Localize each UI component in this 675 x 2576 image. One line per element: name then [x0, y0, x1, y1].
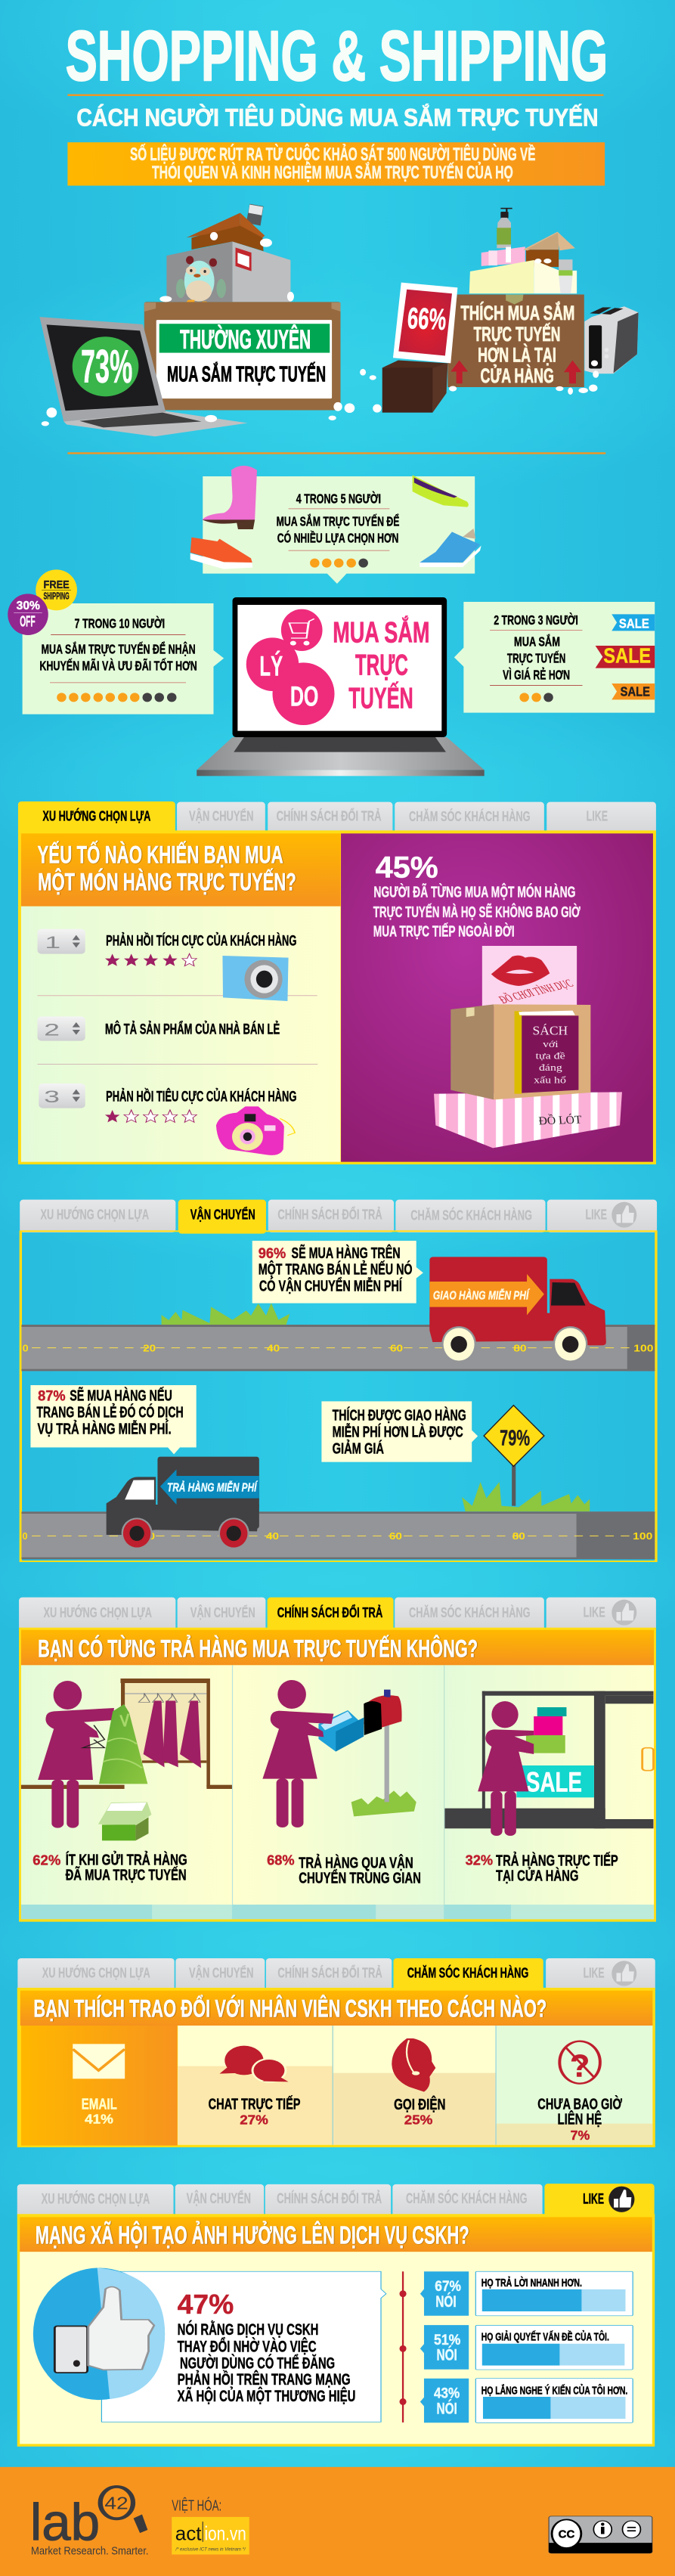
factor 1: 1: [45, 933, 60, 952]
badge: free shipping: [36, 569, 77, 610]
callout: 47%: NÓI RẰNG DỊCH VỤ CSKH: [178, 2320, 318, 2339]
laptop: reasons for online shopping: TUYẾN: [348, 681, 413, 715]
callout: 96%: [252, 1241, 423, 1303]
badge: 30% off: OFF: [20, 612, 36, 630]
cell: never 7%: 7%: [571, 2128, 590, 2143]
callout: 47%: NGƯỜI DÙNG CÓ THỂ ĐĂNG: [180, 2354, 335, 2373]
callout: 47%: PHẢN HỒI TRÊN TRANG MẠNG: [178, 2370, 351, 2388]
tabs: [19, 1598, 656, 1630]
stat: 67%: [420, 2271, 633, 2316]
section: shipping: [20, 1200, 657, 1561]
icon: no question mark: [559, 2041, 600, 2084]
logo: lab42: Market Research. Smarter.: [31, 2545, 148, 2557]
cell: chat 27%: CHAT TRỰC TIẾP: [209, 2094, 301, 2113]
icon: dark return truck: [107, 1457, 259, 1548]
icon: grass: [162, 1303, 290, 1325]
stat: 43%: 43%: [434, 2385, 460, 2401]
panel: 45% embarrassing purchases: 45%: [376, 850, 438, 884]
icon: brown box with text: HƠN LÀ TẠI: [478, 343, 556, 367]
icon: cart: [290, 618, 314, 646]
icon: woman holding dress: [38, 1681, 114, 1828]
cell: email 41%: EMAIL: [82, 2095, 117, 2113]
callout: 47%: THAY ĐỔI NHỜ VÀO VIỆC: [178, 2337, 317, 2356]
section: buying trends: PHẢN HỒI TIÊU CỰC CỦA KHÁCH HÀNG: [106, 1087, 296, 1105]
icon: yellow box: [469, 260, 577, 293]
callout: 47%: 47%: [178, 2289, 234, 2320]
section: return policy: [19, 1598, 656, 1922]
logo: lab42: lab: [30, 2494, 100, 2551]
icon: red sale tag: [596, 644, 655, 668]
logo: lab42: 42: [104, 2494, 128, 2513]
reasons section: SHIPPING: [44, 591, 70, 602]
section: shipping: THÍCH ĐƯỢC GIAO HÀNG: [333, 1406, 466, 1424]
stat: 43%: NÓI: [436, 2399, 457, 2418]
badge: 30% off: 30%: [17, 599, 40, 612]
icon: pink boot: [203, 466, 257, 529]
panel: 7 in 10 people: [23, 603, 224, 715]
logo: action.vn: act: [175, 2522, 202, 2545]
icon: headset agent: [392, 2038, 435, 2092]
icon: small brown box: [187, 213, 265, 251]
section: social media: [0, 2184, 675, 2576]
callout: 87%: [30, 1385, 197, 1454]
road 1: [21, 1325, 655, 1371]
heading: what makes you buy: YẾU TỐ NÀO KHIẾN BẠN MUA: [38, 841, 283, 869]
tabs: CHÍNH SÁCH ĐỔI TRẢ: [277, 1964, 382, 1981]
section: customer care: [17, 1958, 655, 2147]
icon: grass: [351, 1790, 416, 1816]
cell: never 7%: [496, 2026, 652, 2145]
laptop: reasons for online shopping: MUA SẮM: [333, 615, 429, 649]
callout: 87%: SẼ MUA HÀNG NẾU: [70, 1387, 172, 1405]
road 2: 0: [23, 1531, 28, 1542]
badge: free shipping: FREE: [44, 578, 70, 591]
panel: 7 in 10 people: 7 TRONG 10 NGƯỜI: [75, 615, 165, 631]
panel frame: [18, 830, 656, 1164]
road 1: 80: [513, 1343, 527, 1353]
road 1: 20: [143, 1343, 156, 1353]
timeline: [399, 2271, 407, 2423]
icon: cardboard box with book: đáng: [539, 1062, 562, 1073]
icon: woman with gifts: [478, 1701, 534, 1836]
footer: VIỆT HÓA:: [172, 2497, 221, 2514]
stat: 67%: NÓI: [435, 2292, 457, 2311]
tabs: XU HƯỚNG CHỌN LỰA: [42, 808, 150, 824]
heading: what makes you buy: [21, 833, 340, 907]
icon: orange sale tag: [612, 684, 655, 699]
icon: cardboard box with book: xấu hổ: [534, 1074, 566, 1086]
icon: grass: [462, 1482, 590, 1511]
tabs: [17, 1958, 655, 1991]
factor 2: [38, 1016, 317, 1065]
icon: mailbox: [364, 1690, 402, 1735]
cell: chat 27%: [178, 2026, 333, 2145]
panel background: [21, 1665, 654, 1905]
icon: lime flat shoe: [413, 475, 469, 507]
section: return policy: TRẢ HÀNG QUA VẬN: [299, 1853, 413, 1872]
road 2: 20: [142, 1531, 155, 1542]
survey banner: [67, 142, 605, 186]
icon: creative commons: [549, 2516, 652, 2553]
tabs: XU HƯỚNG CHỌN LỰA: [42, 2190, 150, 2207]
column 2: 68%: [262, 1680, 421, 1887]
tabs: LIKE: [584, 1604, 605, 1620]
icon: thumbs up circle: [33, 2268, 165, 2400]
packing peanuts: [42, 232, 599, 426]
icon: blue camera: [222, 956, 289, 1001]
factor 2: 2: [44, 1020, 60, 1039]
reasons section: MUA SẮM TRỰC TUYẾN ĐỂ NHẬN: [42, 640, 196, 657]
logo: action.vn: [172, 2517, 249, 2555]
tabs: LIKE: [586, 1207, 607, 1223]
road 2: 60: [389, 1531, 402, 1542]
panel: 45% embarrassing purchases: [341, 833, 653, 1162]
stat: 51%: [420, 2325, 633, 2370]
stat: 43%: [420, 2379, 633, 2423]
column 2: 68%: 68%: [267, 1852, 295, 1868]
tabs: CHÍNH SÁCH ĐỔI TRẢ: [277, 2190, 382, 2206]
stat: 67%: 67%: [435, 2277, 461, 2294]
section: shipping: TRẢ HÀNG MIỄN PHÍ: [167, 1480, 258, 1494]
tabs: CHÍNH SÁCH ĐỔI TRẢ: [277, 1207, 382, 1223]
icon: red delivery truck: [429, 1257, 606, 1362]
tabs: [20, 1200, 657, 1234]
icon: orange shoe: [190, 538, 252, 569]
icon: chat bubbles: [219, 2046, 289, 2083]
callout: 47%: [101, 2271, 386, 2422]
cell: call 25%: [333, 2026, 495, 2145]
panel frame: [20, 1231, 656, 1561]
laptop: reasons for online shopping: LÝ: [259, 650, 283, 681]
road 1: 40: [267, 1343, 280, 1353]
icon: tube: [559, 259, 572, 293]
callout: 87%: 87%: [38, 1388, 66, 1404]
icon: green dress: [99, 1704, 147, 1784]
column 1: 62%: 62%: [33, 1852, 60, 1868]
icon: pink gift box: [481, 246, 525, 266]
logo: action.vn: ion.vn: [205, 2522, 246, 2545]
icon: cardboard box with book: [451, 1004, 590, 1099]
icon: bottle: [497, 208, 512, 248]
icon: poster with lips: [482, 946, 577, 1006]
panel: 2 in 3 people: [454, 602, 655, 713]
laptop: reasons for online shopping: DO: [290, 680, 318, 711]
tabs: XU HƯỚNG CHỌN LỰA: [42, 1964, 150, 1981]
badge: 30% off: [8, 594, 48, 635]
section: buying trends: [18, 801, 656, 1164]
section: buying trends: MỘT MÓN HÀNG TRỰC TUYẾN?: [38, 868, 296, 896]
icon: road sign 79%: [484, 1406, 544, 1506]
road 2: [21, 1511, 655, 1559]
icon: return box: [98, 1802, 151, 1840]
icon: owl toy: [176, 256, 226, 307]
section: buying trends: PHẢN HỒI TÍCH CỰC CỦA KHÁCH HÀNG: [106, 932, 296, 949]
tabs: [17, 2184, 655, 2218]
illustration: boxes with 66%: [382, 208, 639, 413]
column 1: 62%: ÍT KHI GỬI TRẢ HÀNG: [66, 1850, 187, 1869]
panel body: [20, 2252, 652, 2444]
icon: blue sale tag: [612, 614, 655, 631]
section: shipping: CÓ VẬN CHUYỂN MIỄN PHÍ: [259, 1277, 402, 1294]
cell: call 25%: 25%: [404, 2113, 432, 2128]
icon: blue parcel: [318, 1710, 364, 1752]
reasons section: [8, 466, 655, 776]
icon: brown box with text: [447, 294, 584, 388]
reasons section: KHUYẾN MÃI VÀ ƯU ĐÃI TỐT HƠN: [39, 658, 197, 674]
factor 1: [38, 929, 317, 1001]
icon: brown box with text: TRỰC TUYẾN: [473, 323, 560, 346]
icon: phone: [246, 204, 264, 226]
column 1: 62%: ĐÃ MUA TRỰC TUYẾN: [66, 1865, 187, 1884]
tabs: VẬN CHUYỂN: [189, 1964, 253, 1981]
panel: 4 in 5 people: 4 TRONG 5 NGƯỜI: [296, 490, 381, 507]
icon: tan box: [523, 231, 575, 267]
cell: email 41%: [21, 2026, 178, 2146]
tabs: LIKE: [583, 2190, 604, 2207]
callout: 47%: XÃ HỘI CỦA MỘT THƯƠNG HIỆU: [178, 2386, 355, 2405]
icon: dark box: [382, 360, 447, 413]
icon: striped box: ĐỒ LÓT: [538, 1113, 582, 1127]
panel: ranked factors: [21, 907, 340, 1162]
panel: 2 in 3 people: MUA SẮM: [514, 633, 560, 649]
callout: prefer free shipping: GIẢM GIÁ: [333, 1440, 384, 1457]
laptop: reasons for online shopping: TRỰC: [355, 648, 408, 681]
panel frame: [17, 1988, 655, 2147]
icon: creative commons: CC: [559, 2528, 574, 2540]
panel: 4 in 5 people: [203, 476, 475, 584]
icon: toaster: [584, 306, 639, 374]
icon: tablet with 66%: 66%: [407, 302, 447, 336]
stat: 51%: 51%: [434, 2332, 460, 2348]
section: return policy: CHUYỂN TRUNG GIAN: [299, 1868, 421, 1887]
column 3: 32%: 32%: [466, 1852, 493, 1868]
column 1: 62%: [21, 1679, 232, 1884]
panel: 2 in 3 people: VÌ GIÁ RẺ HƠN: [503, 667, 570, 683]
icon: road sign 79%: 79%: [500, 1426, 530, 1450]
header section: [39, 16, 639, 454]
footer: [0, 2467, 675, 2576]
panel: 2 in 3 people: TRỰC TUYẾN: [507, 650, 565, 666]
cell: never 7%: LIÊN HỆ: [558, 2109, 602, 2128]
stat: 51%: NÓI: [436, 2345, 457, 2364]
header section: MUA SẮM TRỰC TUYẾN: [167, 362, 326, 386]
tabs: VẬN CHUYỂN: [187, 2190, 251, 2206]
icon: gift stack: [526, 1707, 566, 1753]
icon: hanger: [82, 1725, 104, 1748]
icon: brown box with label: [144, 302, 340, 411]
icon: woman with parcel: [262, 1680, 333, 1827]
road 1: 100: [633, 1343, 654, 1353]
tabs: CHÍNH SÁCH ĐỔI TRẢ: [277, 1604, 382, 1620]
icon: cardboard box with book: với: [543, 1039, 559, 1049]
road 2: 80: [512, 1531, 525, 1542]
logo: action.vn: /* exclusive ICT news in Vietnam */: [175, 2547, 246, 2552]
icon: pink camera: [216, 1106, 295, 1155]
tabs: LIKE: [584, 1964, 605, 1981]
icon: no question mark: ?: [570, 2049, 590, 2084]
icon: tablet with 66%: [393, 283, 457, 363]
section: shipping: SẼ MUA HÀNG TRÊN: [292, 1245, 401, 1262]
section: shipping: TRANG BÁN LẺ ĐÓ CÓ DỊCH: [36, 1403, 184, 1421]
tabs: VẬN CHUYỂN: [190, 1604, 255, 1620]
icon: envelope: [73, 2044, 125, 2078]
tabs: [18, 801, 656, 834]
panel: ranked factors: MÔ TẢ SẢN PHẨM CỦA NHÀ BÁN LẺ: [105, 1020, 280, 1037]
tabs: VẬN CHUYỂN: [190, 1207, 255, 1223]
icon: cardboard box with book: SÁCH: [532, 1023, 568, 1038]
callout: prefer free shipping: [321, 1401, 478, 1462]
laptop: reasons for online shopping: [197, 597, 485, 776]
icon: brown box with label: THƯỜNG XUYÊN: [180, 325, 311, 355]
icon: wardrobe: [21, 1679, 232, 1789]
icon: blue sneaker: [420, 529, 481, 567]
tabs: VẬN CHUYỂN: [189, 808, 253, 824]
road 2: 40: [266, 1531, 279, 1542]
panel: 4 in 5 people: CÓ NHIỀU LỰA CHỌN HƠN: [277, 530, 398, 546]
icon: grey box: [166, 241, 290, 302]
icon: cardboard box with book: tựa đề: [535, 1050, 565, 1062]
icon: store front: SALE: [526, 1766, 582, 1797]
road 2: 100: [633, 1531, 652, 1542]
icon: red delivery truck: GIAO HÀNG MIỄN PHÍ: [433, 1288, 530, 1302]
callout: 96%: 96%: [259, 1245, 286, 1261]
tabs: CHÍNH SÁCH ĐỔI TRẢ: [277, 808, 382, 824]
column 3: 32%: [444, 1691, 654, 1884]
panel frame: [19, 1628, 656, 1922]
section: shipping: MIỄN PHÍ HƠN LÀ ĐƯỢC: [333, 1423, 463, 1440]
bottom strip: [21, 1905, 654, 1919]
factor 3: [39, 1083, 296, 1155]
cell: call 25%: GỌI ĐIỆN: [394, 2095, 445, 2113]
icon: striped box: [434, 1092, 622, 1148]
panel: 4 in 5 people: MUA SẮM TRỰC TUYẾN ĐỂ: [277, 513, 399, 529]
panel frame: [17, 2214, 655, 2447]
section: shipping: MỘT TRANG BÁN LẺ NẾU NÓ: [259, 1260, 413, 1279]
road 1: 0: [23, 1343, 29, 1353]
icon: store front: [444, 1691, 654, 1828]
panel: 45% embarrassing purchases: ĐỒ CHƠI TÌNH DỤC: [496, 976, 576, 1006]
tabs: XU HƯỚNG CHỌN LỰA: [41, 1207, 149, 1223]
cell: email 41%: 41%: [85, 2112, 113, 2127]
icon: laptop with 73%: 73%: [81, 340, 132, 393]
icon: laptop with 73%: [39, 317, 247, 436]
road 1: 60: [390, 1343, 403, 1353]
tabs: XU HƯỚNG CHỌN LỰA: [44, 1604, 152, 1620]
tabs: LIKE: [587, 808, 608, 824]
cell: chat 27%: 27%: [240, 2113, 268, 2128]
callout: 87%: VỤ TRẢ HÀNG MIỄN PHÍ.: [38, 1420, 172, 1437]
icon: brown box with text: CỬA HÀNG: [481, 364, 554, 388]
factor 3: 3: [44, 1087, 60, 1106]
illustration: boxes with 73%: [39, 204, 340, 436]
